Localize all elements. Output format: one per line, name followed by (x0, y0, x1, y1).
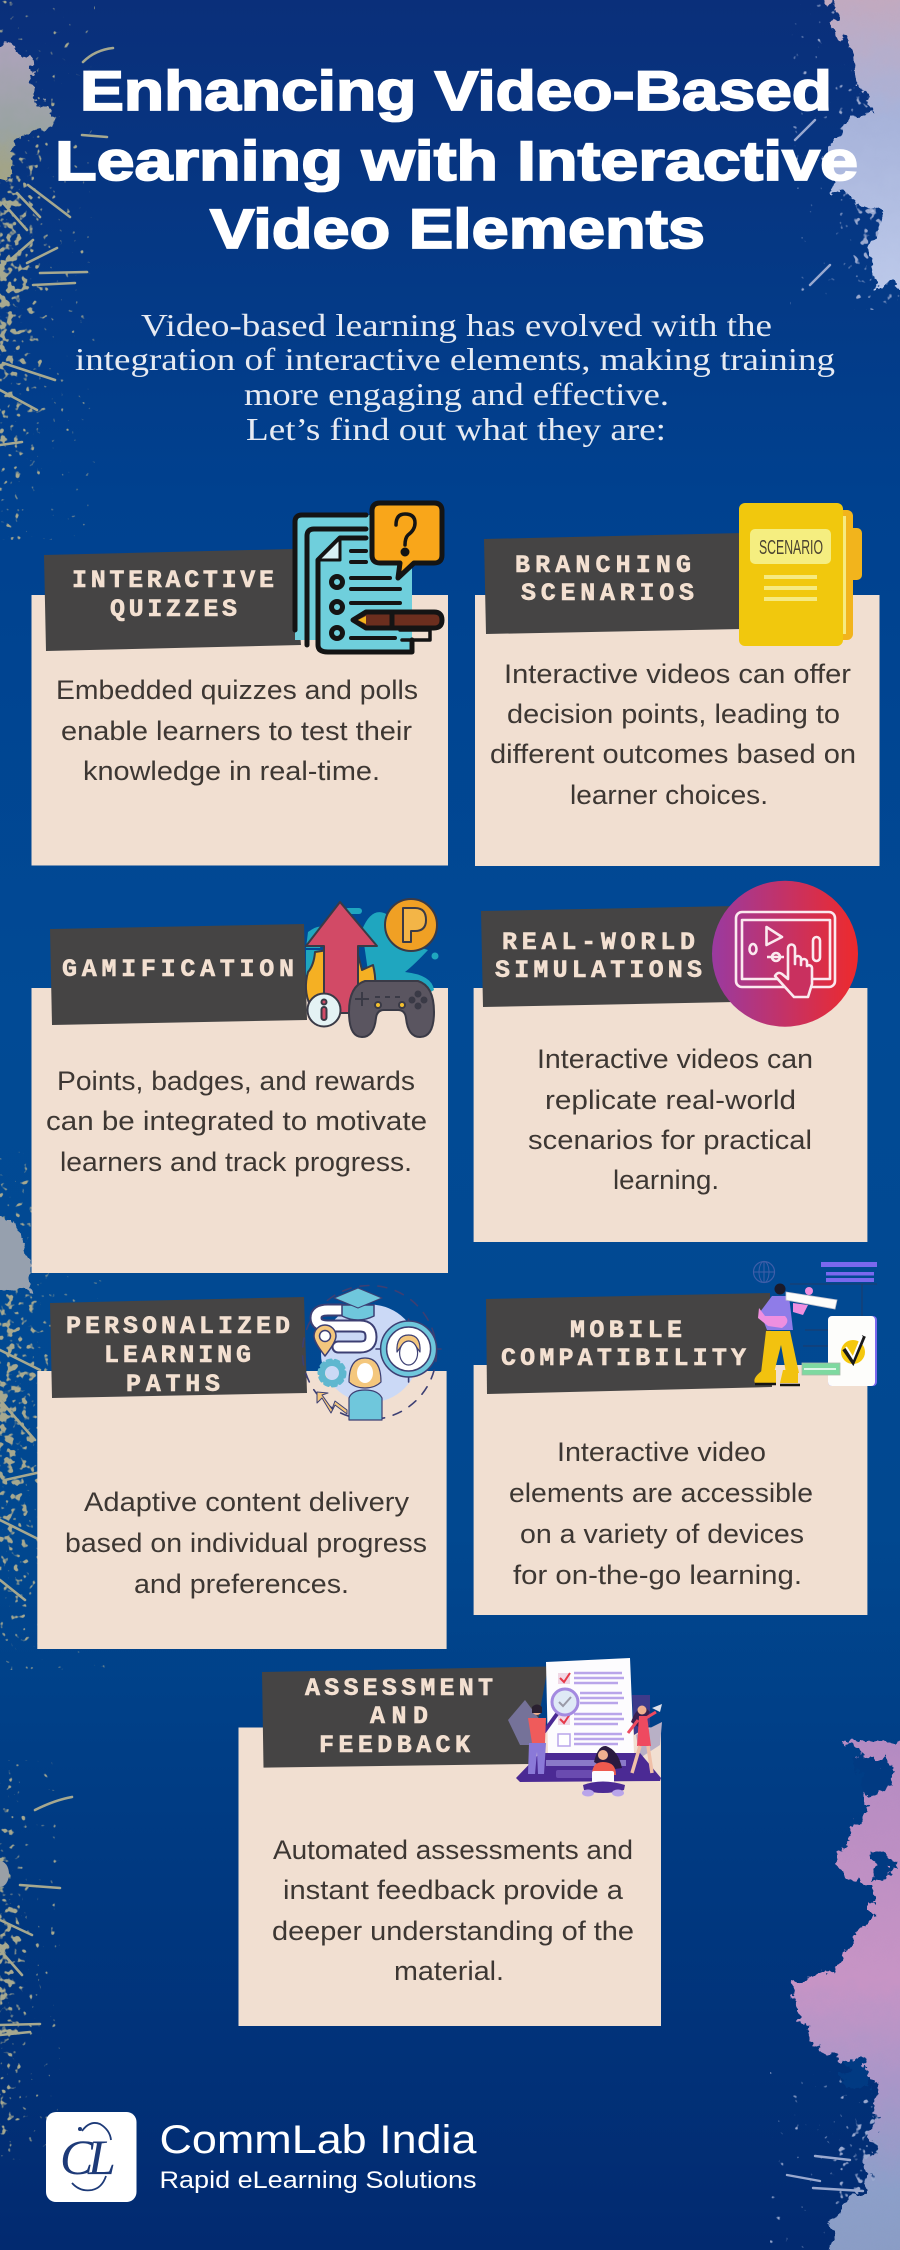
body text: different outcomes based on (490, 739, 856, 769)
heading: real-world simulations (481, 906, 735, 1007)
body text: Embedded quizzes and polls (56, 675, 418, 705)
icon: touch tablet on gradient circle (712, 881, 858, 1027)
title: Enhancing Video-Based (80, 59, 832, 122)
heading: assessment and feedback: AND (370, 1702, 428, 1731)
panel: gamification (32, 899, 448, 1273)
body text: enable learners to test their (61, 716, 412, 746)
panel: branching scenarios (475, 503, 880, 866)
heading: assessment and feedback: FEEDBACK (319, 1731, 470, 1760)
body text: material. (394, 1956, 504, 1986)
body text: learners and track progress. (60, 1147, 412, 1177)
icon: checklist with three people (508, 1658, 662, 1796)
heading: branching scenarios: BRANCHING (515, 551, 691, 580)
body text (56, 675, 418, 786)
body text (65, 1487, 427, 1599)
panel: real-world simulations (474, 881, 867, 1242)
heading: assessment and feedback: ASSESSMENT (305, 1674, 493, 1703)
icon: quiz sheet with question bubble (295, 503, 442, 652)
body text: Adaptive content delivery (84, 1487, 410, 1517)
body text: on a variety of devices (520, 1519, 804, 1549)
title: Video Elements (210, 197, 705, 260)
body text: replicate real-world (545, 1085, 796, 1115)
body text (528, 1044, 813, 1195)
heading: real-world simulations: REAL-WORLD (502, 928, 695, 957)
body text: Interactive video (557, 1437, 766, 1467)
body text: learning. (613, 1165, 719, 1195)
intro text: more engaging and effective. (244, 376, 669, 412)
icon: CL logo mark (46, 2112, 136, 2202)
icon: arrow, coin and game controller (306, 899, 438, 1037)
heading: gamification: GAMIFICATION (62, 955, 294, 984)
body text: Interactive videos can (537, 1044, 813, 1074)
heading: interactive quizzes: QUIZZES (110, 595, 237, 624)
panel: interactive quizzes (32, 503, 448, 866)
body text: based on individual progress (65, 1528, 427, 1558)
body text: learner choices. (570, 780, 768, 810)
body text (509, 1437, 813, 1590)
body text: and preferences. (134, 1569, 349, 1599)
intro text: integration of interactive elements, making training (75, 341, 835, 377)
body text: Points, badges, and rewards (57, 1066, 415, 1096)
title (55, 59, 858, 260)
heading: real-world simulations: SIMULATIONS (495, 956, 702, 985)
icon: scenario folder (739, 503, 862, 646)
body text: decision points, leading to (507, 699, 840, 729)
panel: mobile compatibility (474, 1262, 877, 1615)
heading: personalized learning paths: PATHS (126, 1370, 220, 1399)
body text (490, 659, 856, 810)
logo: CommLab India: CommLab India (160, 2118, 477, 2162)
icon: scenario folder: SCENARIO (759, 537, 823, 559)
panel: assessment and feedback (238, 1658, 662, 2026)
body text: Automated assessments and (273, 1835, 633, 1865)
panel: personalized learning paths (37, 1286, 447, 1649)
logo: CommLab India (46, 2112, 477, 2202)
intro text: Let’s find out what they are: (246, 411, 666, 447)
icon: person with phone and check mark (754, 1262, 877, 1386)
icon: CL logo mark: L (87, 2129, 116, 2185)
heading: interactive quizzes (44, 549, 301, 651)
heading: mobile compatibility: MOBILE (570, 1316, 682, 1345)
body text (272, 1835, 634, 1986)
logo: CommLab India: Rapid eLearning Solutions (160, 2167, 476, 2194)
body text: can be integrated to motivate (46, 1106, 427, 1136)
body text (46, 1066, 427, 1177)
icon: CL logo mark: C (60, 2129, 94, 2185)
heading: personalized learning paths: LEARNING (104, 1341, 251, 1370)
heading: gamification (50, 924, 307, 1025)
heading: branching scenarios: SCENARIOS (521, 579, 694, 608)
intro text: Video-based learning has evolved with the (141, 307, 772, 343)
title: Learning with Interactive (55, 129, 858, 192)
body text: for on-the-go learning. (513, 1560, 802, 1590)
body text: knowledge in real-time. (83, 756, 380, 786)
heading: branching scenarios (484, 533, 742, 634)
heading: personalized learning paths (50, 1297, 307, 1399)
heading: assessment and feedback (262, 1666, 548, 1768)
heading: interactive quizzes: INTERACTIVE (72, 566, 274, 595)
icon: learning path with student and target (302, 1286, 441, 1420)
body text: instant feedback provide a (283, 1875, 624, 1905)
intro text (75, 307, 835, 447)
heading: personalized learning paths: PERSONALIZED (66, 1312, 290, 1341)
body text: Interactive videos can offer (504, 659, 851, 689)
heading: mobile compatibility (486, 1293, 772, 1394)
body text: elements are accessible (509, 1478, 813, 1508)
body text: scenarios for practical (528, 1125, 812, 1155)
heading: mobile compatibility: COMPATIBILITY (501, 1344, 746, 1373)
body text: deeper understanding of the (272, 1916, 634, 1946)
